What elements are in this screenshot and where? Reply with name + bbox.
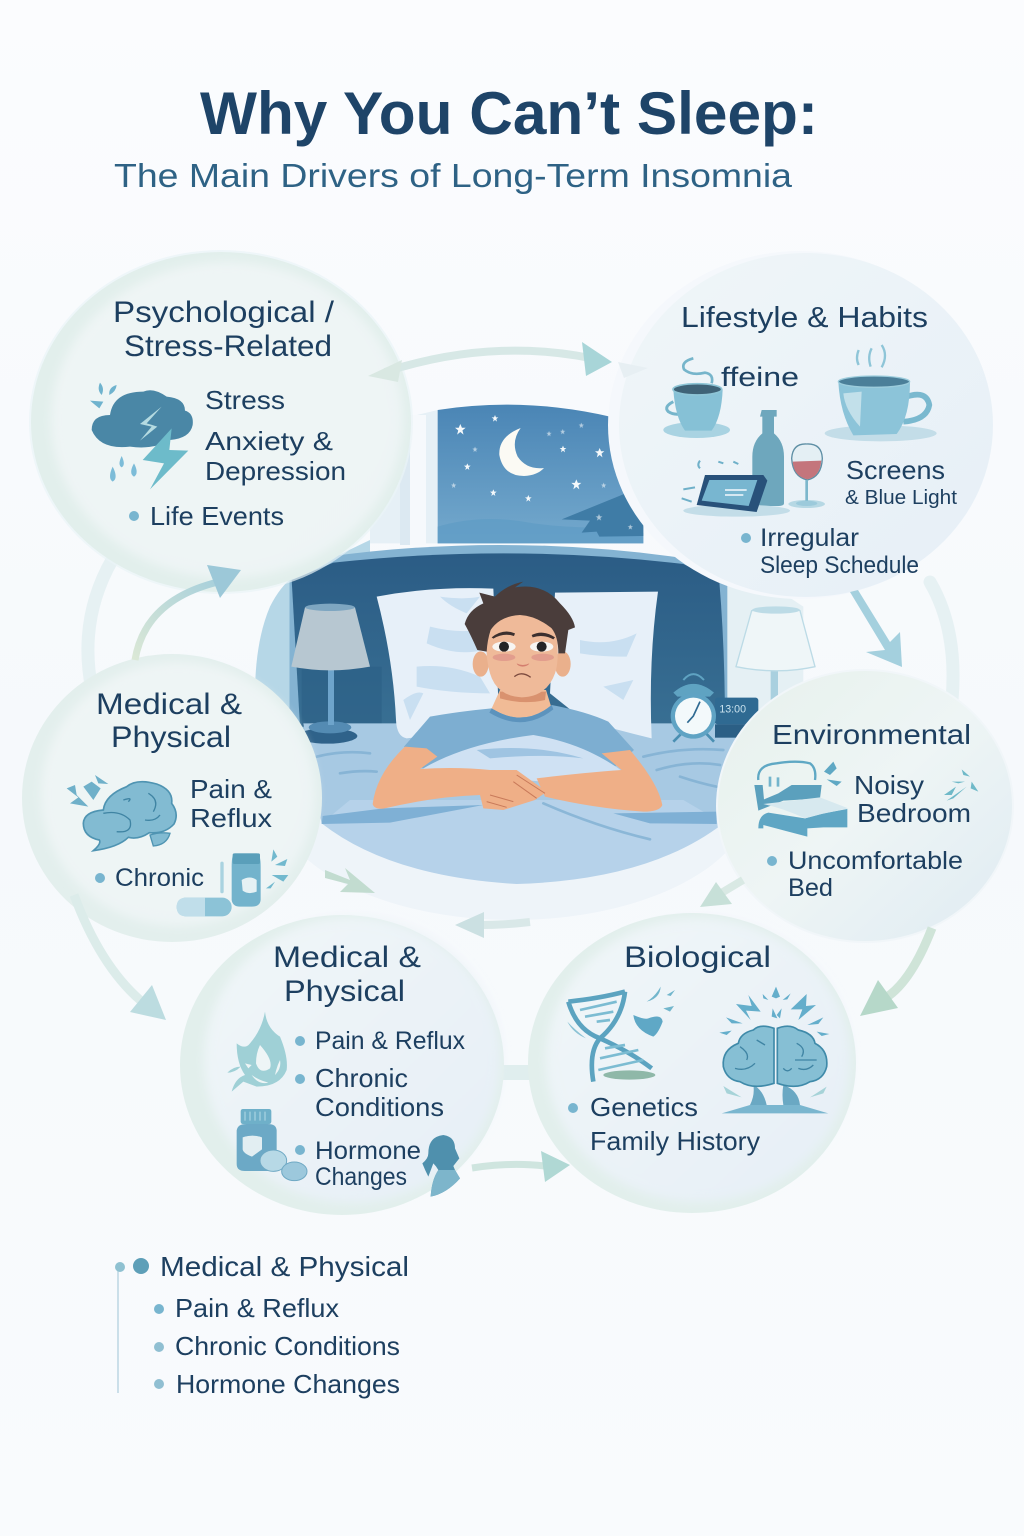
- alarm clock: 13:00: [719, 704, 746, 716]
- icon: flame: [227, 1012, 287, 1092]
- stars: [451, 415, 633, 530]
- heading: Medical &: [273, 941, 421, 974]
- panel: medical and physical (bottom): Pain & Reflux: [315, 1027, 465, 1055]
- panel: psychological / stress-related: Anxiety &: [205, 426, 333, 456]
- panel: biological: Family History: [590, 1126, 760, 1156]
- panel: lifestyle and habits: & Blue Light: [845, 487, 957, 509]
- heading: Lifestyle & Habits: [681, 302, 928, 334]
- hair: [465, 582, 575, 653]
- person: [373, 582, 662, 812]
- panel: medical and physical (left): Physical: [111, 721, 231, 754]
- heading: Environmental: [772, 719, 971, 750]
- outer ring arcs: [88, 560, 953, 700]
- legend: medical and physical list: Medical & Physical: [160, 1251, 409, 1282]
- ears: [473, 651, 489, 677]
- crescent moon: [499, 428, 544, 476]
- panel: medical and physical (bottom): [180, 915, 504, 1215]
- nose and mouth: [517, 663, 529, 667]
- panel: psychological / stress-related: Depression: [205, 456, 346, 486]
- headboard: [289, 545, 727, 733]
- panel: medical and physical (bottom): Conditions: [315, 1092, 444, 1122]
- central illustration: sleepless person in bed: [255, 405, 815, 884]
- icon: brain tree with sparks: [719, 987, 829, 1113]
- panel: lifestyle and habits: Sleep Schedule: [760, 552, 919, 579]
- t-shirt: [404, 705, 634, 777]
- panel: environmental: [718, 671, 1012, 941]
- arrow: medical left to centre: [325, 868, 375, 893]
- heading: Biological: [624, 941, 771, 974]
- arrow: environmental to biological: [860, 928, 932, 1016]
- eyes: [492, 642, 516, 652]
- pillows: [377, 588, 658, 738]
- window night sky: [438, 405, 643, 543]
- panel: lifestyle and habits: [619, 253, 993, 597]
- icon: woman silhouette: [422, 1135, 460, 1197]
- left lamp: [291, 604, 370, 744]
- list: lifestyle items: ffeine: [721, 362, 799, 392]
- panel: medical and physical (left): Reflux: [190, 803, 272, 833]
- legend: medical and physical list: Hormone Changes: [176, 1369, 400, 1399]
- panel: lifestyle and habits: Irregular: [760, 524, 859, 552]
- panel: environmental: Uncomfortable: [788, 847, 963, 875]
- panel: medical and physical (bottom): Hormone: [315, 1137, 421, 1165]
- legend: medical and physical list: Chronic Conditions: [175, 1331, 400, 1361]
- arrow: medical bottom to biological: [472, 1151, 570, 1182]
- panel: lifestyle and habits: Screens: [846, 455, 945, 485]
- panel: medical and physical (bottom): Chronic: [315, 1063, 408, 1093]
- title: Why You Can’t Sleep:: [200, 80, 818, 147]
- arrow: medical left to medical bottom: [74, 895, 166, 1020]
- arrow: environmental to centre: [700, 880, 743, 907]
- panel: psychological / stress-related: [31, 252, 411, 592]
- arrow: medical to psychological: [135, 565, 241, 660]
- blanket top: [417, 735, 623, 782]
- legend: medical and physical list: [115, 1251, 409, 1399]
- list: biological items: [568, 1103, 578, 1113]
- heading: Medical &: [96, 688, 242, 721]
- icon: medicine bottle: [237, 1109, 307, 1181]
- panel: medical and physical (left): [22, 654, 322, 942]
- alarm clock: [671, 674, 758, 742]
- list: medical items: [295, 1036, 305, 1046]
- panel: biological: Genetics: [590, 1092, 698, 1122]
- hills and tree silhouette: [438, 492, 643, 543]
- arrow: lifestyle to environmental: [850, 590, 902, 667]
- icon: storm cloud: [90, 383, 193, 489]
- subtitle: The Main Drivers of Long-Term Insomnia: [114, 157, 793, 194]
- arrow: lifestyle to psychological, top: [368, 342, 648, 382]
- panel: environmental: Bed: [788, 874, 833, 902]
- heading: Psychological /: [113, 296, 335, 329]
- under-eye shadows: [493, 654, 515, 661]
- window wall and frame: [370, 410, 438, 543]
- panel: medical and physical (bottom): Changes: [315, 1163, 407, 1191]
- panel: biological: [528, 913, 856, 1213]
- left wall wash: [255, 540, 370, 733]
- list: stress items: Stress: [205, 385, 285, 415]
- arrow: biological to medical: [455, 912, 530, 938]
- face: [486, 614, 558, 697]
- list: pain and reflux: Pain &: [190, 774, 272, 804]
- panel: psychological / stress-related: Stress-Related: [124, 330, 332, 363]
- icon: aching brain: [67, 775, 176, 851]
- icon: dna helix and heart: [567, 987, 675, 1082]
- icon: pills and bottle: [177, 849, 288, 916]
- icon: bed: [754, 762, 978, 837]
- right wall: [643, 500, 803, 733]
- arms and hands: [373, 747, 547, 810]
- panel: environmental: Bedroom: [857, 798, 971, 828]
- panel: medical and physical (bottom): Physical: [284, 975, 405, 1008]
- icons: cups, bottle, wine, phone: [663, 345, 937, 517]
- eyebrows: [492, 632, 555, 639]
- connector between bottom circles: [500, 1065, 534, 1080]
- panel: psychological / stress-related: Life Events: [150, 501, 284, 531]
- list: environmental items: Noisy: [854, 770, 924, 800]
- right lamp: [736, 606, 815, 710]
- legend: medical and physical list: Pain & Reflux: [175, 1293, 339, 1323]
- panel: medical and physical (left): Chronic: [115, 864, 204, 892]
- bubble halos: [29, 250, 1014, 943]
- scene halo: [273, 670, 753, 920]
- mattress and blanket: [303, 723, 743, 884]
- neck: [492, 690, 552, 718]
